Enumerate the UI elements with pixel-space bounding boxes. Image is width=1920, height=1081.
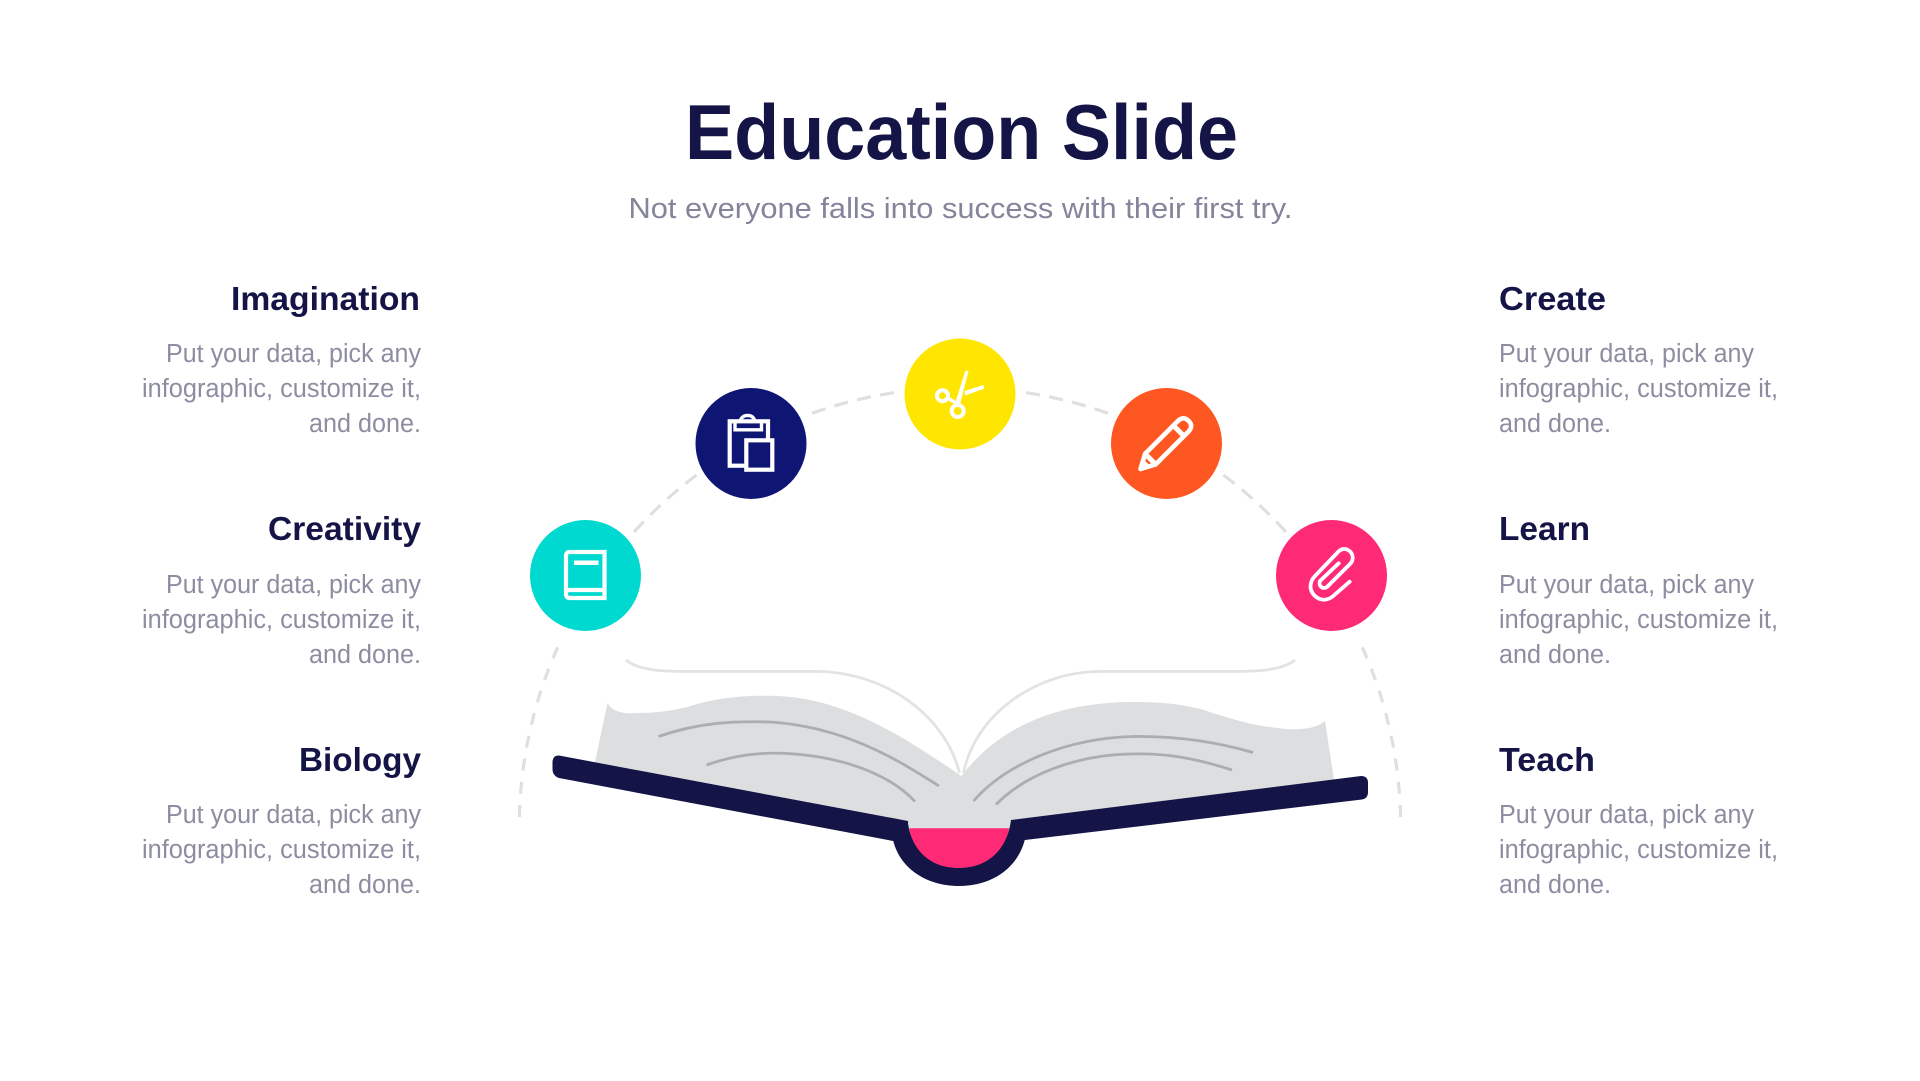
text block: Create: and done. [1499, 410, 1611, 438]
text block: Learn: Put your data, pick any [1499, 571, 1754, 599]
text block: Create: infographic, customize it, [1499, 375, 1778, 403]
text block: Imagination [142, 280, 421, 438]
left cover [552, 755, 908, 841]
text block: Learn: Learn [1499, 510, 1590, 547]
pink bookmark [909, 828, 1009, 870]
text block: Imagination: Put your data, pick any [166, 340, 421, 368]
text block: Imagination: and done. [309, 410, 421, 438]
title: Education Slide [685, 88, 1238, 176]
text block: Create: Create [1499, 280, 1606, 317]
icon: orange circle with pencil [1111, 388, 1222, 499]
text block: Creativity: Put your data, pick any [166, 571, 421, 599]
text block: Create: Put your data, pick any [1499, 340, 1754, 368]
text block: Biology: and done. [309, 871, 421, 899]
illustration: open book [552, 660, 1368, 886]
icon: yellow circle with scissors [904, 338, 1016, 450]
icon: teal circle with book [530, 520, 641, 631]
icon: pink circle with paperclip [1276, 520, 1387, 631]
flying page right [964, 660, 1295, 773]
text block: Biology [142, 741, 422, 899]
text block: Creativity: infographic, customize it, [142, 606, 421, 634]
text block: Imagination: Imagination [231, 280, 420, 317]
text block: Create [1499, 280, 1778, 438]
text block: Learn [1499, 510, 1778, 669]
book pages [595, 696, 1334, 832]
text block: Learn: infographic, customize it, [1499, 606, 1778, 634]
page lines [658, 722, 1253, 804]
flying page left [626, 660, 960, 773]
right cover [1011, 776, 1368, 840]
text block: Teach [1499, 741, 1778, 899]
text block: Teach: Put your data, pick any [1499, 801, 1754, 829]
dashed arc [519, 393, 1401, 817]
text block: Teach: and done. [1499, 871, 1611, 899]
text block: Biology: infographic, customize it, [142, 836, 421, 864]
text block: Creativity [142, 510, 422, 669]
icon: navy circle with clipboard [696, 388, 806, 499]
text block: Biology: Put your data, pick any [166, 801, 421, 829]
spine [893, 820, 1025, 886]
text block: Learn: and done. [1499, 641, 1611, 669]
text block: Creativity: Creativity [268, 510, 422, 547]
text block: Teach: Teach [1499, 741, 1595, 778]
text block: Creativity: and done. [309, 641, 421, 669]
subtitle: Not everyone falls into success with their first try. [628, 193, 1292, 225]
text block: Teach: infographic, customize it, [1499, 836, 1778, 864]
text block: Imagination: infographic, customize it, [142, 375, 421, 403]
text block: Biology: Biology [299, 741, 422, 778]
